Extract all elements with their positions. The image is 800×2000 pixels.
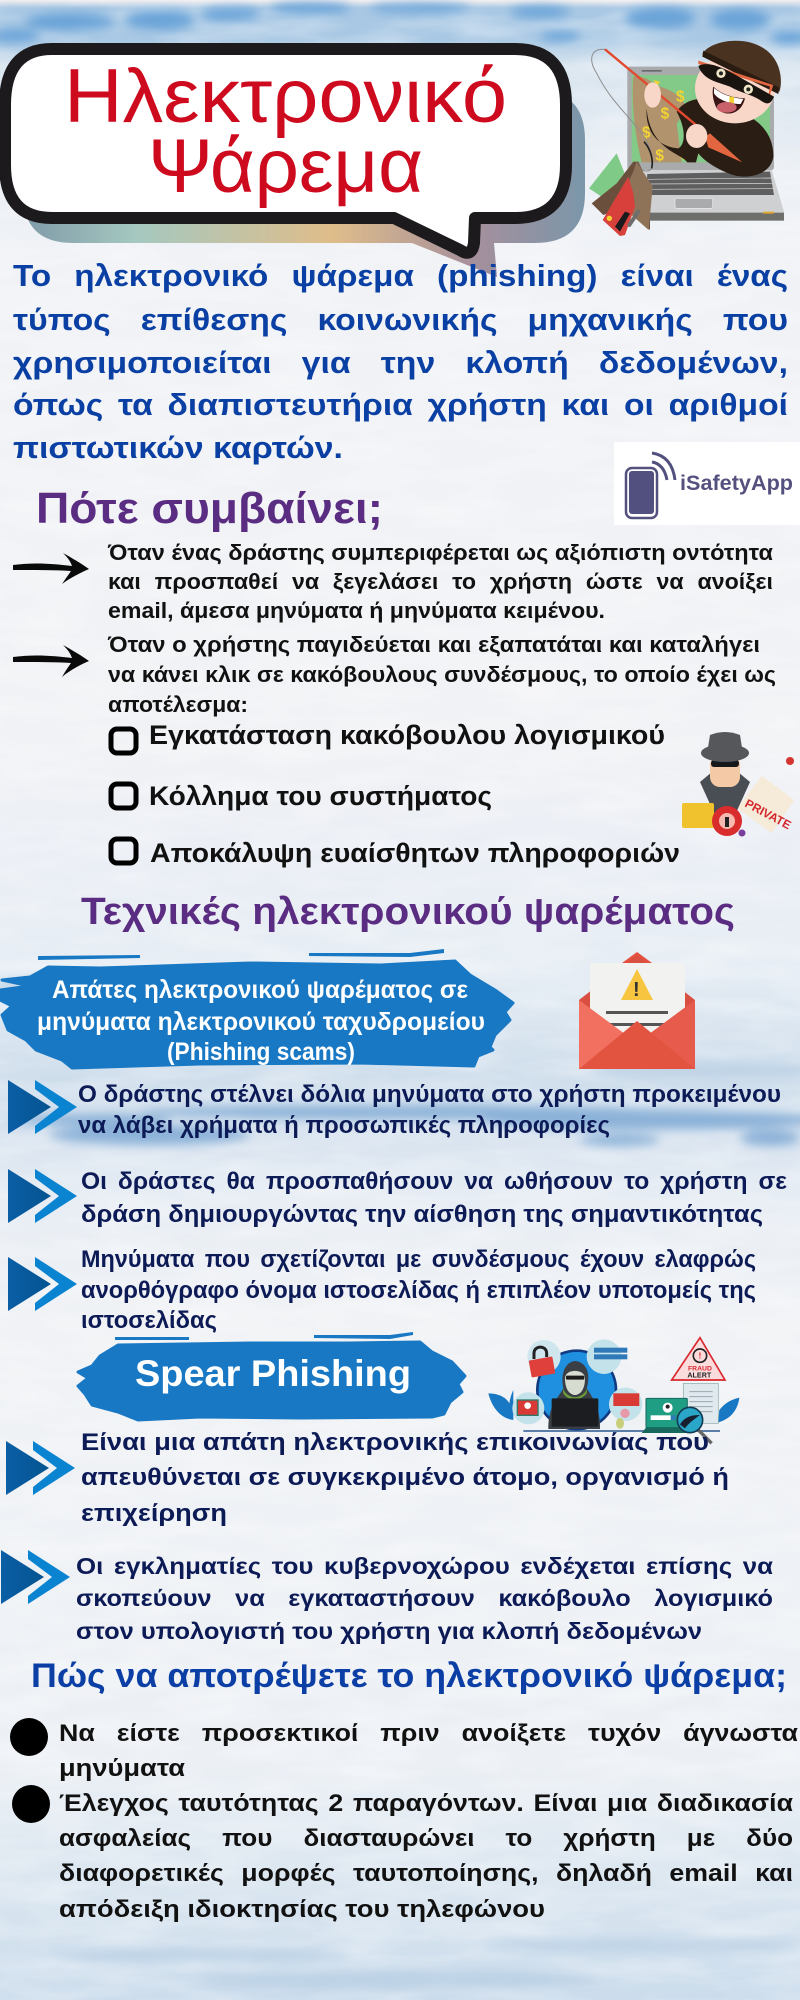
when text 1: email, άμεσα μηνύματα ή μηνύματα κειμένου. (108, 598, 605, 623)
skull bubble (512, 1392, 544, 1424)
when text 1: και προσπαθεί να ξεγελάσει το χρήστη ώστε να ανοίξει (108, 569, 773, 594)
message bubble (609, 1388, 642, 1421)
check item 3: Αποκάλυψη ευαίσθητων πληροφοριών (150, 838, 680, 868)
spear phishing point 2 (1, 1550, 773, 1644)
thief body (647, 99, 773, 177)
laptop screen (627, 67, 774, 170)
icon: thief fishing from laptop: $ (655, 148, 664, 165)
banner: spear phishing: Spear Phishing (135, 1353, 411, 1394)
bullet (12, 1785, 50, 1823)
spear phishing point 1 (6, 1429, 729, 1527)
technique point 3 (8, 1246, 756, 1334)
banner: phishing scams: (Phishing scams) (167, 1038, 355, 1066)
spear phishing point 2: Οι εγκληματίες του κυβερνοχώρου ενδέχεται επίσης να (76, 1553, 773, 1579)
spear phishing point 1: απευθύνεται σε συγκεκριμένο άτομο, οργανισμό ή (81, 1464, 729, 1491)
technique point 3: ανορθόγραφο όνομα ιστοσελίδας ή επιπλέον υποτομείς της (81, 1277, 756, 1304)
prevention item 1: μηνύματα (59, 1755, 185, 1782)
fishing rod and line (592, 49, 652, 171)
icon: thief fishing from laptop: $ (642, 124, 651, 141)
technique point 1: Ο δράστης στέλνει δόλια μηνύματα στο χρήστη προκειμένου (78, 1081, 781, 1108)
prevention item 2: Έλεγχος ταυτότητας 2 παραγόντων. Είναι μια διαδικασία (59, 1790, 793, 1817)
icon: thief fishing from laptop: $ (676, 89, 685, 106)
prevention item 1 (10, 1718, 798, 1782)
prevention item 2: ασφαλείας που διασταυρώνει το χρήστη με δύο (59, 1825, 793, 1852)
green laptop (646, 1398, 687, 1428)
icon: double chevron (8, 1080, 77, 1134)
wallet with money and card (589, 153, 630, 200)
prevention item 1: Να είστε προσεκτικοί πριν ανοίξετε τυχόν άγνωστα (59, 1720, 798, 1747)
arrow 1 (13, 553, 89, 584)
arrow 2 (13, 645, 89, 677)
technique point 1 (8, 1080, 781, 1139)
bubble shadow (23, 90, 585, 277)
technique point 3: ιστοσελίδας (81, 1307, 217, 1334)
when text 1: Όταν ένας δράστης συμπεριφέρεται ως αξιόπιστη οντότητα (107, 540, 773, 565)
icon: warning envelope: ! (633, 979, 640, 1001)
spear phishing point 1: επιχείρηση (81, 1500, 227, 1527)
intro paragraph (13, 258, 788, 465)
icon: double chevron (6, 1441, 75, 1495)
bullet (10, 1718, 48, 1756)
icon: warning envelope (579, 952, 695, 1069)
magnifier (698, 1430, 712, 1443)
icon: hacker illustration with fraud alert: ALERT (687, 1370, 712, 1379)
server bubble (587, 1339, 621, 1374)
icon: hacker illustration with fraud alert: ! (699, 1351, 702, 1361)
logo: iSafetyApp (614, 442, 800, 525)
hands (644, 82, 661, 108)
prevention item 2 (12, 1785, 793, 1923)
spear phishing point 2: σκοπεύουν να εγκαταστήσουν κακόβουλο λογισμικό (76, 1585, 773, 1611)
technique point 2: Οι δράστες θα προσπαθήσουν να ωθήσουν το χρήστη σε (81, 1168, 787, 1195)
icon: thief fishing from laptop: $ (661, 105, 670, 122)
intro paragraph: Το ηλεκτρονικό ψάρεμα (phishing) είναι ένας (13, 258, 788, 293)
technique point 1: να λάβει χρήματα ή προσωπικές πληροφορίες (78, 1112, 610, 1139)
banner: phishing scams: μηνύματα ηλεκτρονικού ταχυδρομείου (37, 1008, 485, 1036)
hacker circle (537, 1351, 616, 1429)
when text 1 (107, 540, 773, 623)
icon: thief fishing from laptop (589, 41, 784, 236)
prevention item 2: απόδειξη ιδιοκτησίας του τηλεφώνου (59, 1896, 545, 1923)
technique point 2 (8, 1168, 787, 1228)
technique point 3: Μηνύματα που σχετίζονται με συνδέσμους έχουν ελαφρώς (81, 1246, 756, 1273)
document (683, 1383, 718, 1423)
banner: spear phishing (78, 1332, 465, 1420)
bubble outline (5, 49, 566, 253)
leaves (488, 1390, 739, 1422)
intro paragraph: πιστωτικών καρτών. (13, 430, 343, 465)
when text 2: να κάνει κλικ σε κακόβουλους συνδέσμους, το οποίο έχει ως (108, 662, 776, 687)
banner: phishing scams (0, 949, 513, 1068)
spear phishing point 1: Είναι μια απάτη ηλεκτρονικής επικοινωνίας που (81, 1429, 709, 1456)
title text: Ψάρεμα (148, 124, 423, 209)
laptop base (643, 170, 784, 221)
icon: spy with private document (682, 732, 794, 836)
intro paragraph: όπως τα διαπιστευτήρια χρήστη και οι αριθμοί (13, 387, 788, 422)
thief head (695, 53, 775, 123)
check item 1: Εγκατάσταση κακόβουλου λογισμικού (149, 720, 665, 750)
icon: hacker illustration with fraud alert: FRAUD (688, 1365, 712, 1372)
heading: how to prevent: Πώς να αποτρέψετε το ηλεκτρονικό ψάρεμα; (31, 1657, 787, 1695)
intro paragraph: τύπος επίθεσης κοινωνικής μηχανικής που (13, 302, 788, 337)
speech bubble title (5, 49, 585, 277)
checklist (111, 720, 680, 868)
title text (64, 54, 507, 209)
logo: iSafetyApp: iSafetyApp (680, 472, 793, 495)
icon: double chevron (8, 1169, 77, 1223)
heading: when it happens: Πότε συμβαίνει; (36, 484, 383, 533)
icon: spy with private document: PRIVATE (743, 796, 794, 832)
heading: phishing techniques: Τεχνικές ηλεκτρονικού ψαρέματος (81, 891, 735, 933)
when text 2: Όταν ο χρήστης παγιδεύεται και εξαπατάται και καταλήγει (107, 632, 760, 657)
spear phishing point 2: στον υπολογιστή του χρήστη για κλοπή δεδομένων (76, 1618, 702, 1644)
icon: phone with signal (626, 453, 675, 518)
check item 2: Κόλλημα του συστήματος (149, 781, 492, 811)
when text 2 (107, 632, 776, 717)
intro paragraph: χρησιμοποιείται για την κλοπή δεδομένων, (13, 345, 788, 380)
icon: double chevron (1, 1550, 70, 1604)
fraud alert sign (672, 1338, 725, 1380)
banner: phishing scams: Απάτες ηλεκτρονικού ψαρέματος σε (52, 976, 468, 1004)
icon: hacker illustration with fraud alert (488, 1338, 739, 1443)
icon: thief fishing from laptop: $ (679, 145, 688, 162)
icon: double chevron (8, 1257, 77, 1311)
technique point 2: δράση δημιουργώντας την αίσθηση της σημαντικότητας (81, 1201, 763, 1228)
prevention item 2: διαφορετικές μορφές ταυτοποίησης, δηλαδή email και (59, 1860, 793, 1887)
lock bubble (527, 1340, 561, 1373)
when text 2: αποτέλεσμα: (108, 692, 248, 717)
title text: Ηλεκτρονικό (64, 54, 507, 139)
